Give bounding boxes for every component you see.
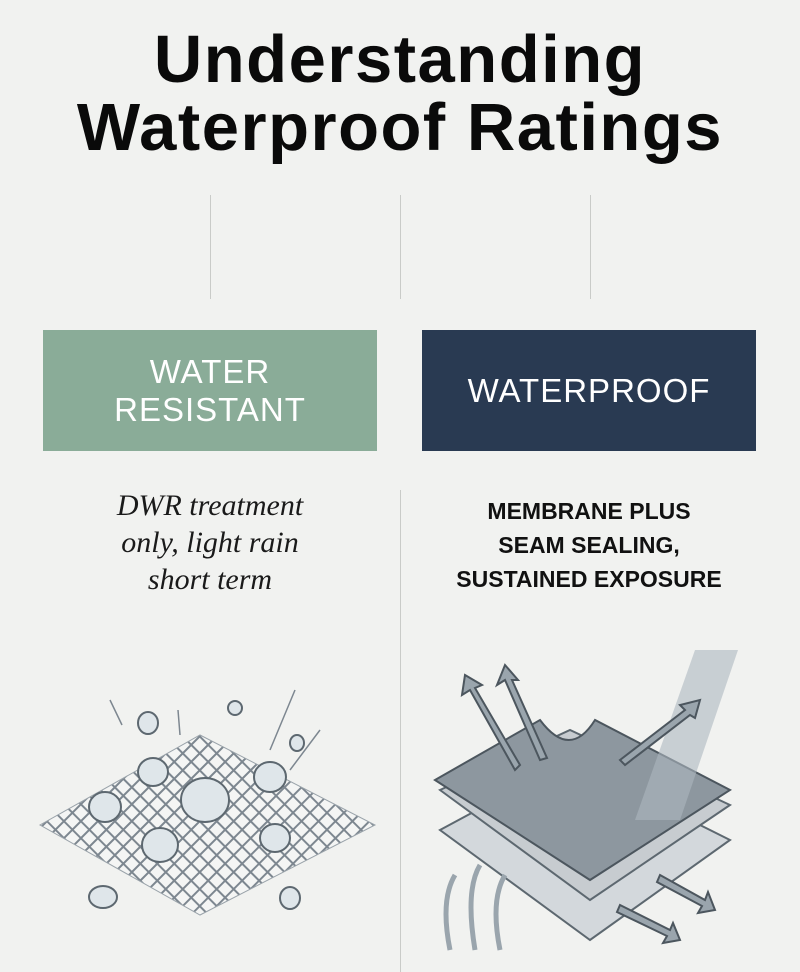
- header: waterproof: WATERPROOF: [468, 372, 710, 408]
- header: waterproof: [422, 330, 756, 451]
- text: waterproof description: MEMBRANE PLUS: [487, 498, 691, 524]
- illustration: waterproof membrane layers: [433, 650, 738, 950]
- connector lines: [210, 195, 591, 299]
- title: Understanding: [154, 22, 646, 97]
- column divider: [400, 490, 401, 972]
- text: waterproof description: [456, 498, 722, 592]
- title: Waterproof Ratings: [77, 90, 723, 165]
- text: water resistant description: only, light rain: [121, 526, 299, 559]
- text: waterproof description: SEAM SEALING,: [498, 532, 680, 558]
- text: water resistant description: [116, 489, 304, 596]
- header: water resistant: WATER: [150, 352, 270, 390]
- title: [77, 22, 723, 165]
- text: water resistant description: short term: [148, 563, 272, 596]
- text: waterproof description: SUSTAINED EXPOSURE: [456, 566, 722, 592]
- illustration: water beading on fabric: [39, 690, 376, 916]
- text: water resistant description: DWR treatment: [117, 489, 303, 522]
- header: water resistant: RESISTANT: [114, 390, 306, 428]
- header: water resistant: [43, 330, 377, 451]
